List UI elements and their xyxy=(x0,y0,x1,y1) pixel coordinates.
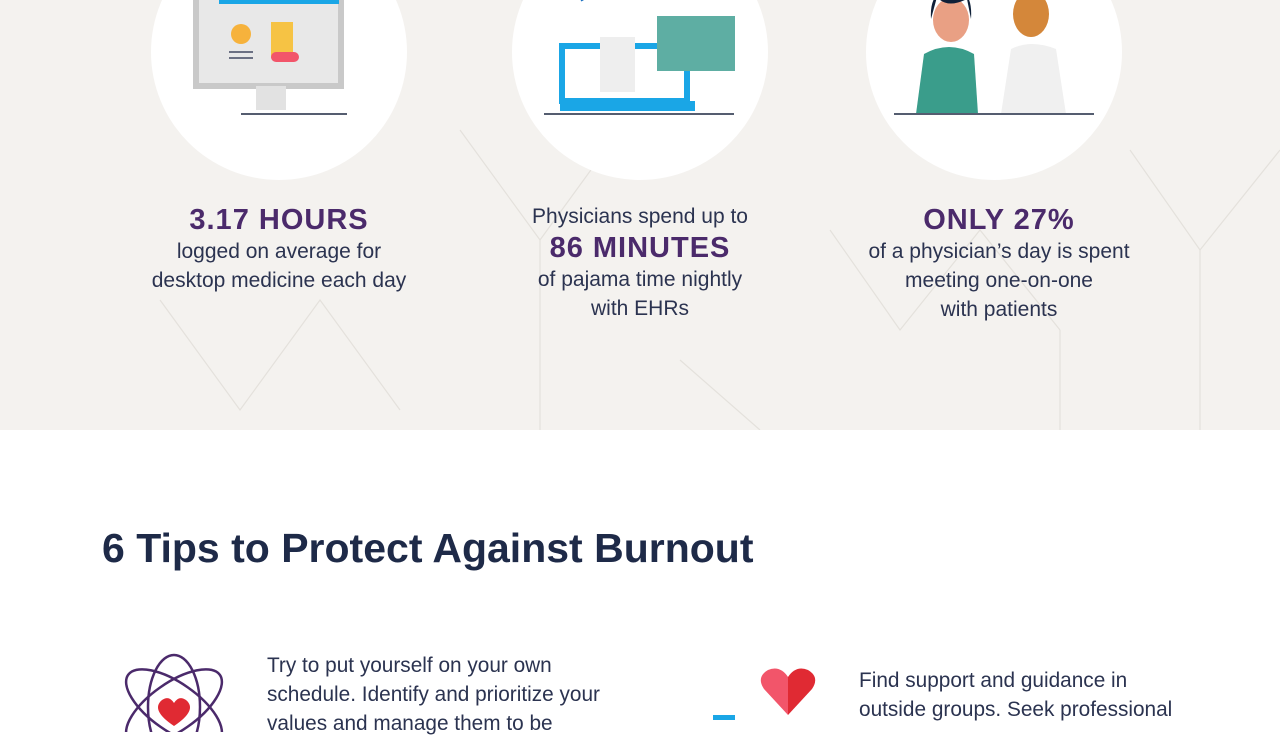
tip 1 text: Try to put yourself on your own xyxy=(267,654,552,677)
tip 1 text: schedule. Identify and prioritize your xyxy=(267,683,600,706)
icon: small blue square xyxy=(713,715,735,720)
icon: atom heart xyxy=(124,654,224,732)
tip 2 text xyxy=(859,669,1172,721)
stat: 3.17 hours xyxy=(152,204,406,292)
stat: 86 minutes: Physicians spend up to of pajama time nightly xyxy=(532,205,748,291)
heading: 6 tips: 6 Tips to Protect Against Burnout xyxy=(102,525,753,571)
stat: 3.17 hours: logged on average for xyxy=(177,240,381,263)
tip 2 text: Find support and guidance in xyxy=(859,669,1127,692)
tip 1 text: values and manage them to be xyxy=(267,712,553,735)
stat: 3.17 hours: 3.17 HOURS xyxy=(189,204,369,236)
icon: patient and doctor xyxy=(866,0,1122,180)
panel: statistics background xyxy=(0,0,1280,430)
stat: 86 minutes: 86 MINUTES xyxy=(550,232,730,264)
stat: only 27%: with patients xyxy=(941,298,1057,321)
stat: 86 minutes: with EHRs xyxy=(591,297,689,320)
tip 1 text xyxy=(267,654,600,735)
stat: 3.17 hours: desktop medicine each day xyxy=(152,269,406,292)
icon: desktop computer xyxy=(151,0,407,180)
stat: only 27%: ONLY 27% xyxy=(923,204,1075,236)
stat: only 27%: of a physician’s day is spent xyxy=(868,240,1130,263)
tip 2 text: outside groups. Seek professional xyxy=(859,698,1172,721)
icon: heart xyxy=(760,668,816,715)
icon: laptop with documents xyxy=(512,0,768,180)
stat: only 27% xyxy=(868,204,1130,321)
stat: only 27%: meeting one-on-one xyxy=(905,269,1093,292)
